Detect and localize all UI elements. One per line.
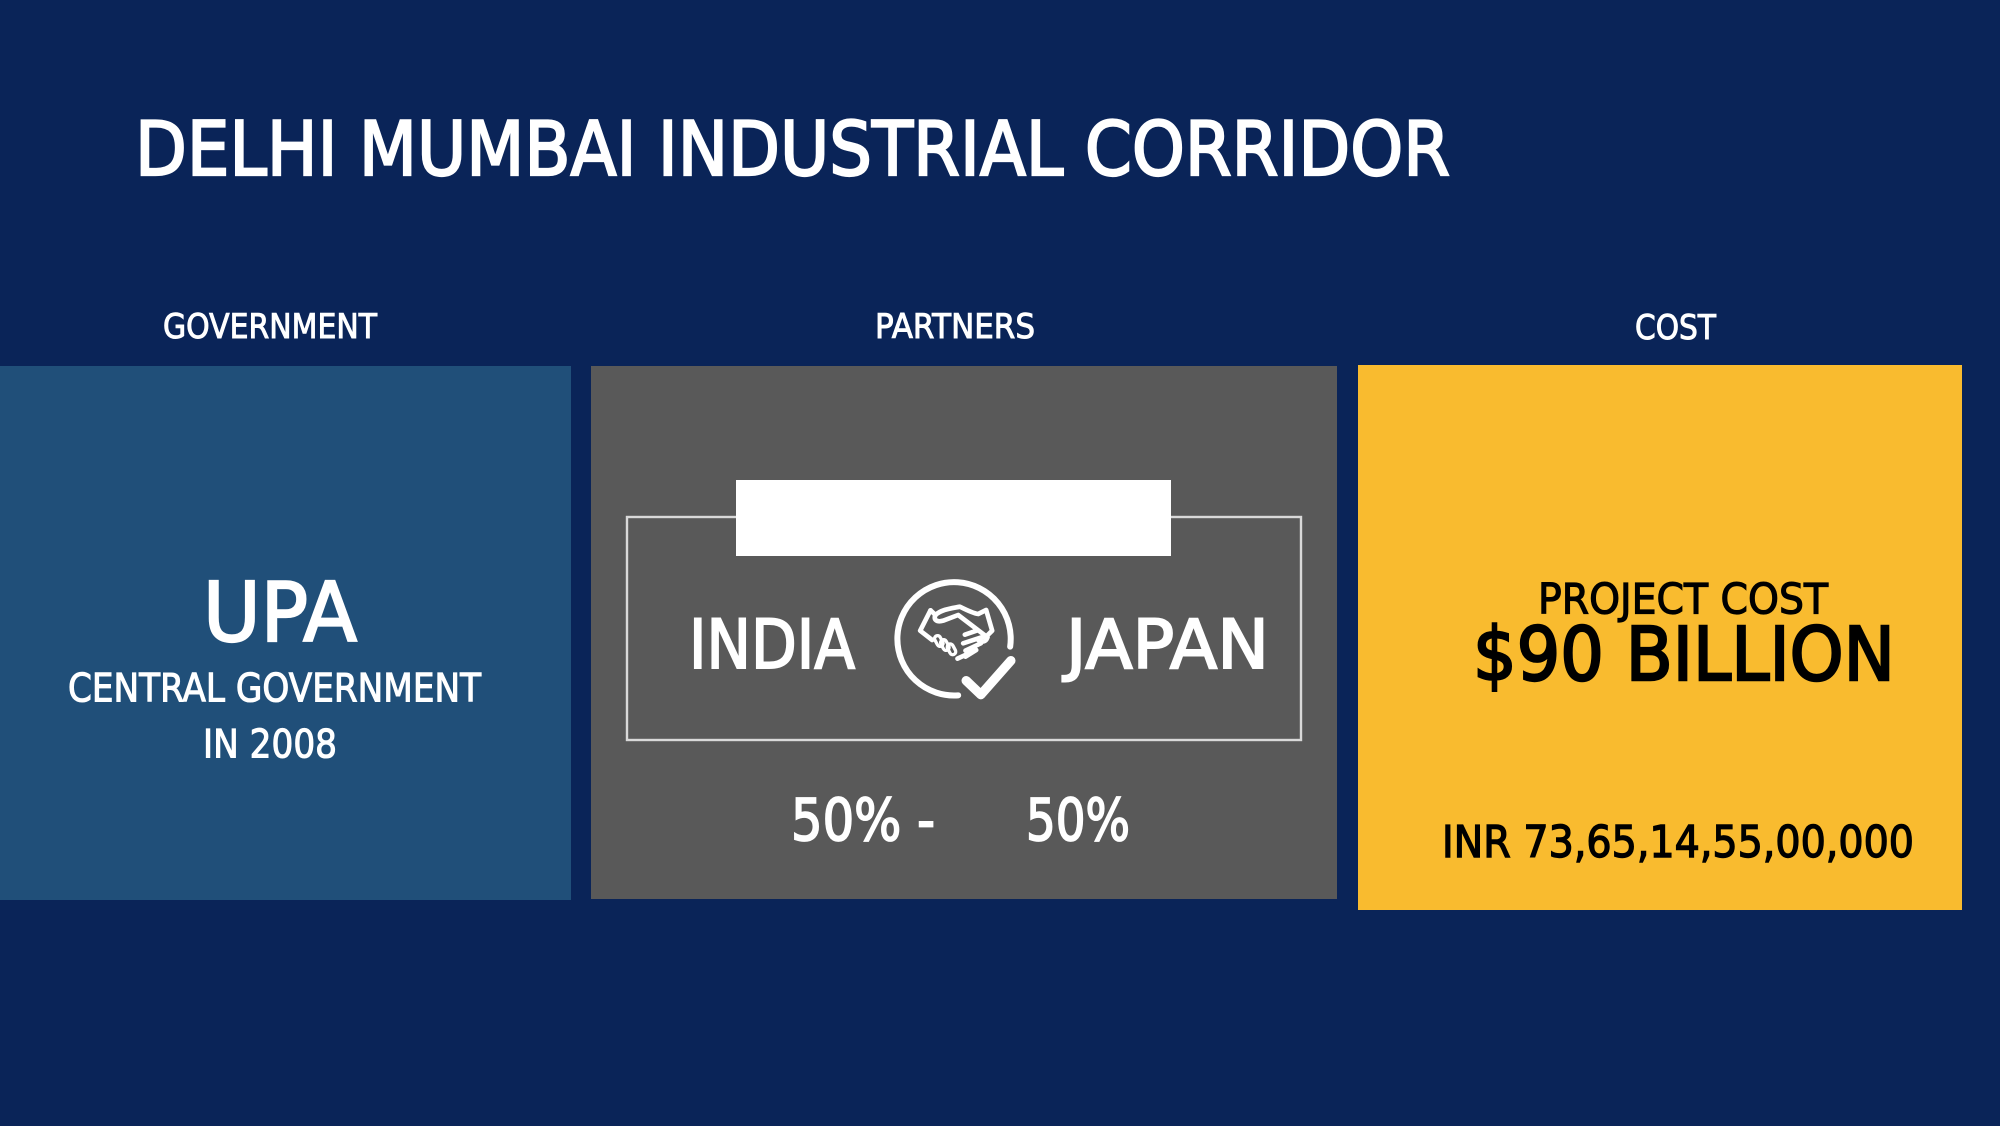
Japan share: 50% [1026,786,1130,854]
government description: CENTRAL GOVERNMENT [68,666,481,712]
India label: INDIA [689,606,855,685]
outlined frame [627,517,1301,740]
project cost label: PROJECT COST [1538,574,1828,624]
India share: 50% - [791,786,935,854]
year: IN 2008 [203,722,337,768]
heading: cost: COST [1635,308,1716,348]
heading: partners: PARTNERS [875,307,1035,347]
panel: cost [1358,365,1962,910]
panel: government [0,366,571,900]
cost in dollars: $90 BILLION [1473,612,1895,698]
party name: UPA [203,566,357,661]
icon: handshake with check mark [897,582,1011,695]
cost in rupees: INR 73,65,14,55,00,000 [1442,817,1914,868]
white label bar [736,480,1171,556]
panel: partners [591,366,1337,899]
Japan label: JAPAN [1062,606,1269,685]
title: DELHI MUMBAI INDUSTRIAL CORRIDOR [135,105,1450,193]
heading: government: GOVERNMENT [163,307,377,347]
